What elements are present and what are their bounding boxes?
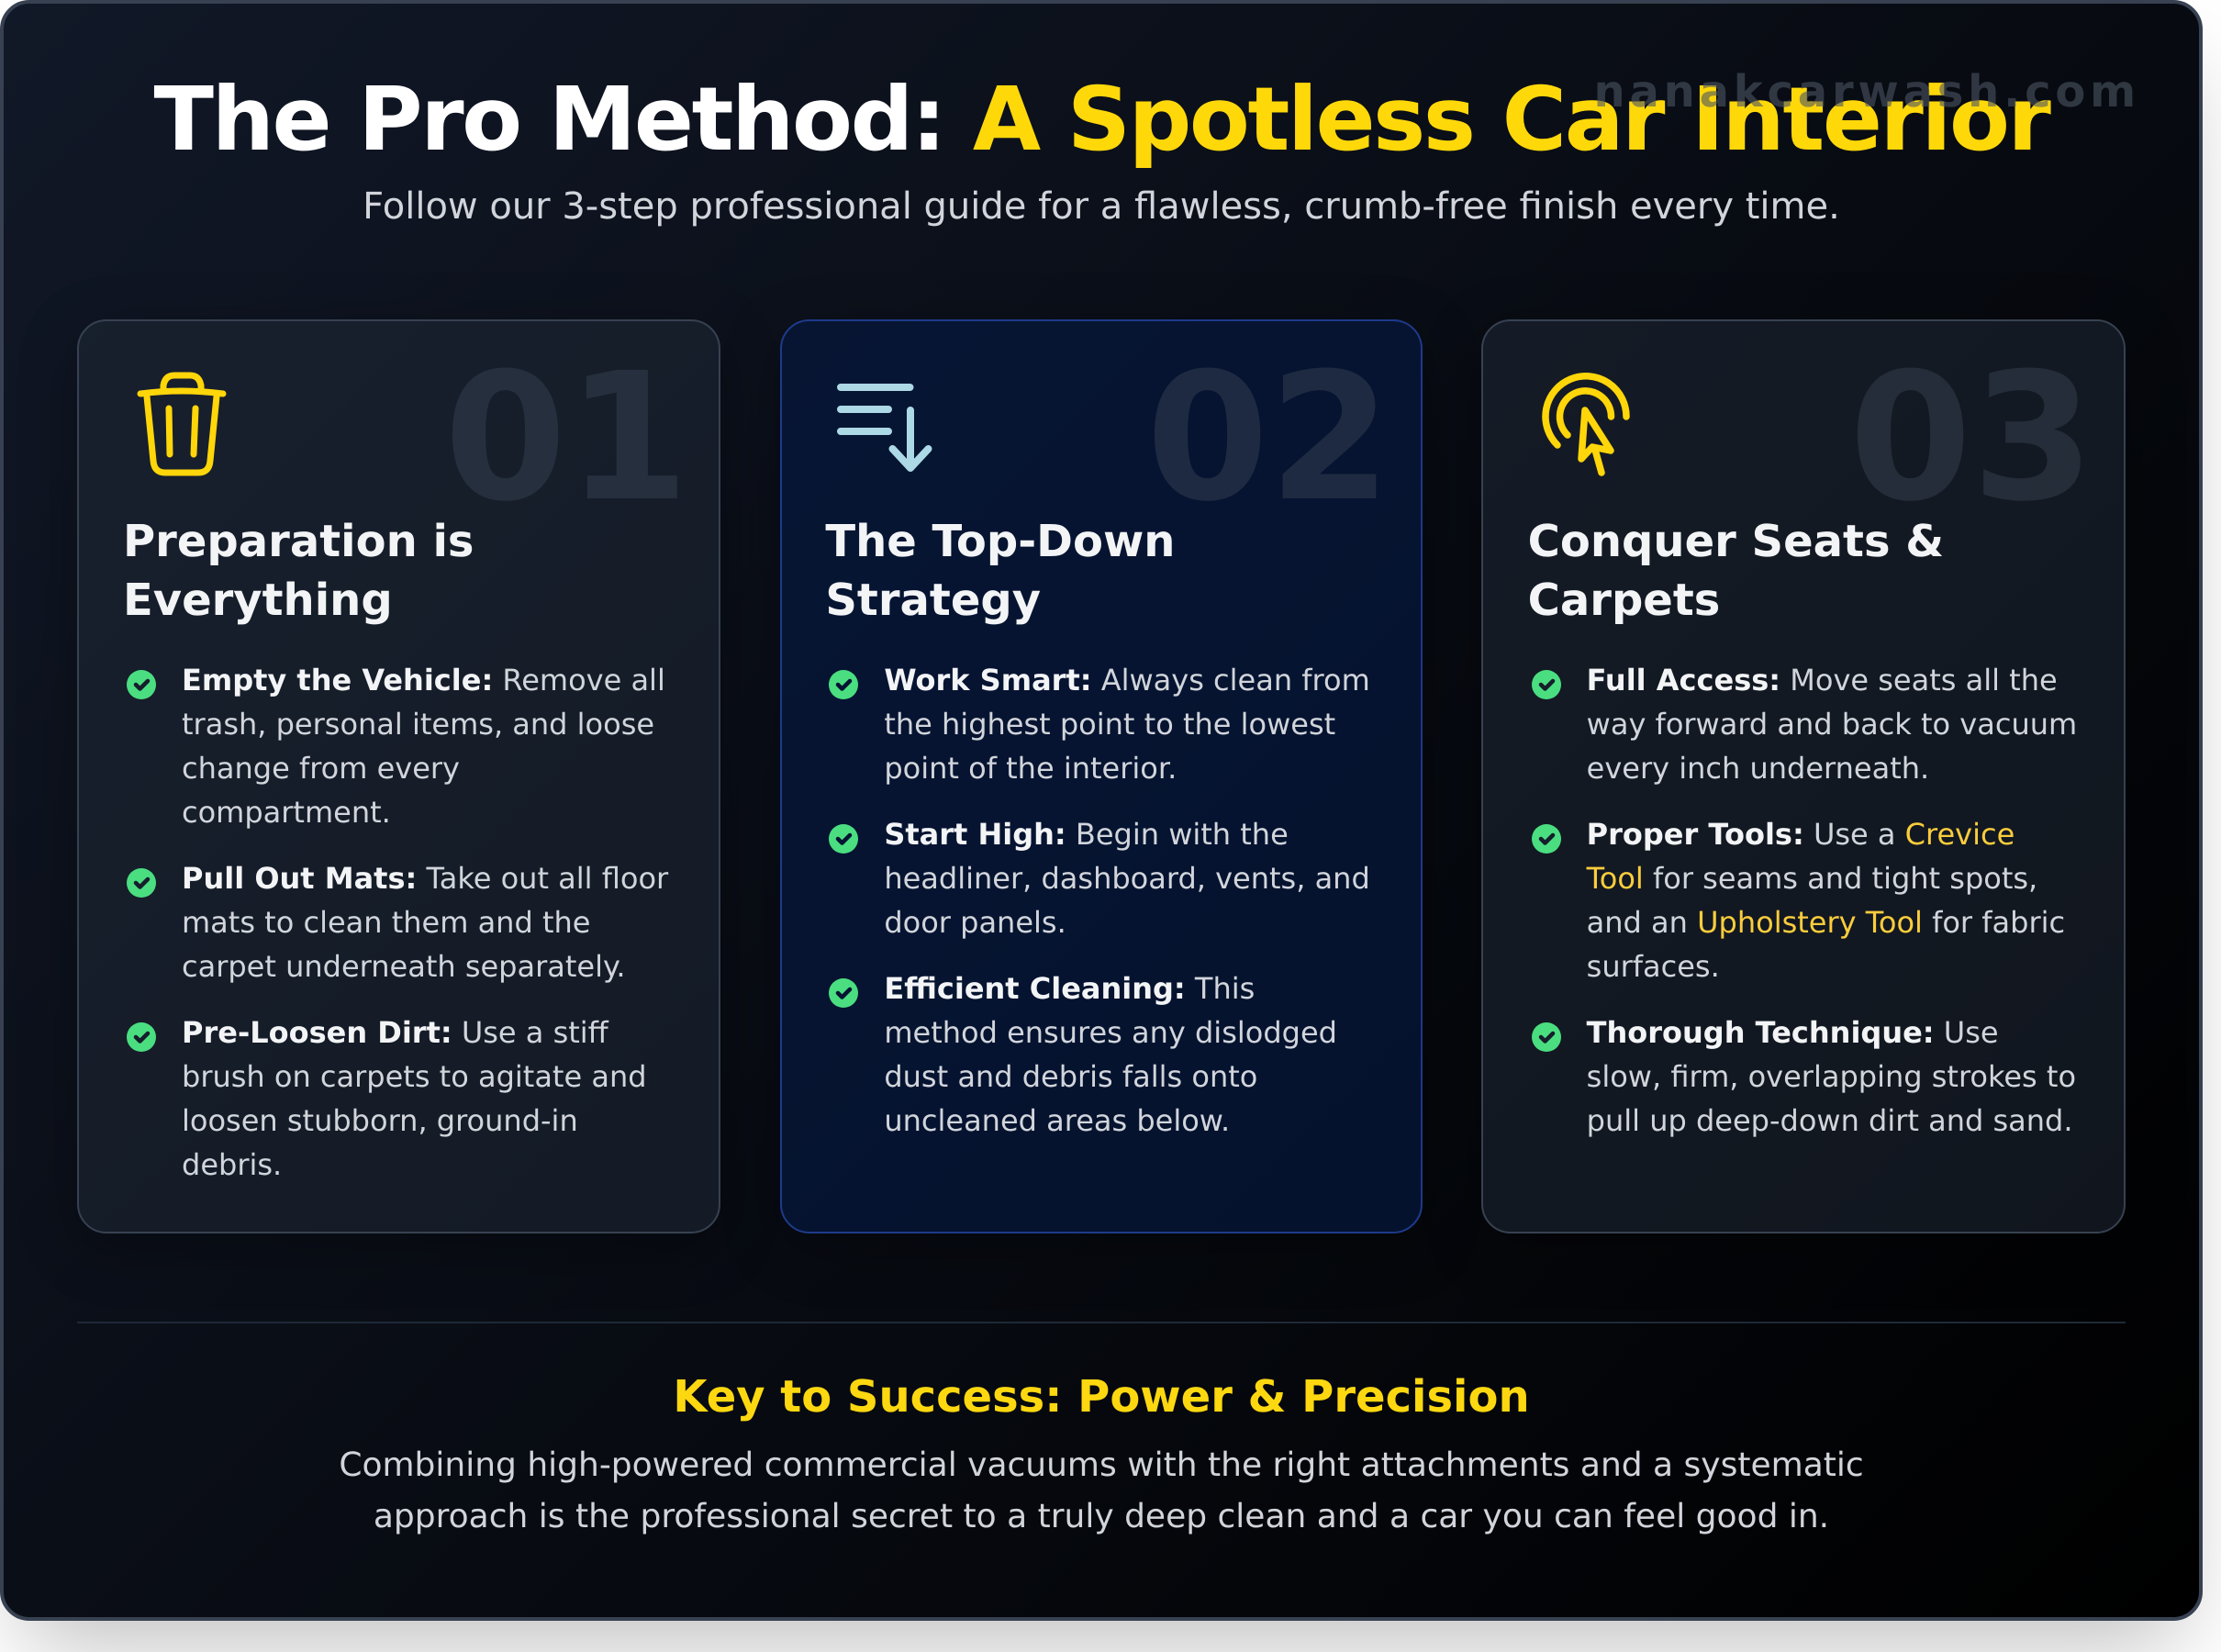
list item: Proper Tools: Use a Crevice Tool for seams and tight spots, and an Upholstery Tool for fabric surfaces. [1587,817,2065,984]
title: The Pro Method: A Spotless Car Interior [154,68,2048,171]
checklist [829,663,1370,1138]
header [154,68,2051,228]
list item: Empty the Vehicle: Remove all trash, personal items, and loose change from every compartment. [182,663,665,830]
list item: Pre-Loosen Dirt: Use a stiff brush on carpets to agitate and loosen stubborn, ground-in debris. [182,1015,647,1182]
icon: list with down arrow [837,384,932,472]
footer text: Combining high-powered commercial vacuums with the right attachments and a systematic approach is the professional secret to a truly deep clean and a car you can feel good in. [339,1446,1864,1535]
heading: Preparation is Everything [123,516,474,626]
list item: Full Access: Move seats all the way forward and back to vacuum every inch underneath. [1587,663,2077,786]
heading: The Top-Down Strategy [825,516,1175,626]
watermark: nanakcarwash.com [1593,66,2140,117]
panel: step 2 top-down strategy [780,319,1423,1233]
icon: trash can [138,373,226,475]
footer heading: Key to Success: Power & Precision [673,1371,1530,1423]
step number 01: 01 [444,336,689,541]
list item: Start High: Begin with the headliner, dashboard, vents, and door panels. [884,817,1370,940]
list item: Thorough Technique: Use slow, firm, overlapping strokes to pull up deep-down dirt and sand. [1587,1015,2076,1138]
step cards row [77,319,2126,1233]
list item: Efficient Cleaning: This method ensures any dislodged dust and debris falls onto uncleaned areas below. [884,971,1337,1138]
heading: Conquer Seats & Carpets [1528,516,1944,626]
step number 03: 03 [1849,336,2094,541]
list item: Work Smart: Always clean from the highest point to the lowest point of the interior. [884,663,1370,786]
checklist [1532,663,2077,1138]
checklist [127,663,668,1182]
subtitle: Follow our 3-step professional guide for a flawless, crumb-free finish every time. [363,185,1840,228]
step number 02: 02 [1146,336,1391,541]
panel: step 3 seats and carpets [1481,319,2126,1233]
panel: step 1 preparation [77,319,720,1233]
icon: pointer with signal arcs [1542,373,1630,476]
list item: Pull Out Mats: Take out all floor mats to clean them and the carpet underneath separately. [182,861,668,984]
footer: key to success [77,1322,2126,1544]
